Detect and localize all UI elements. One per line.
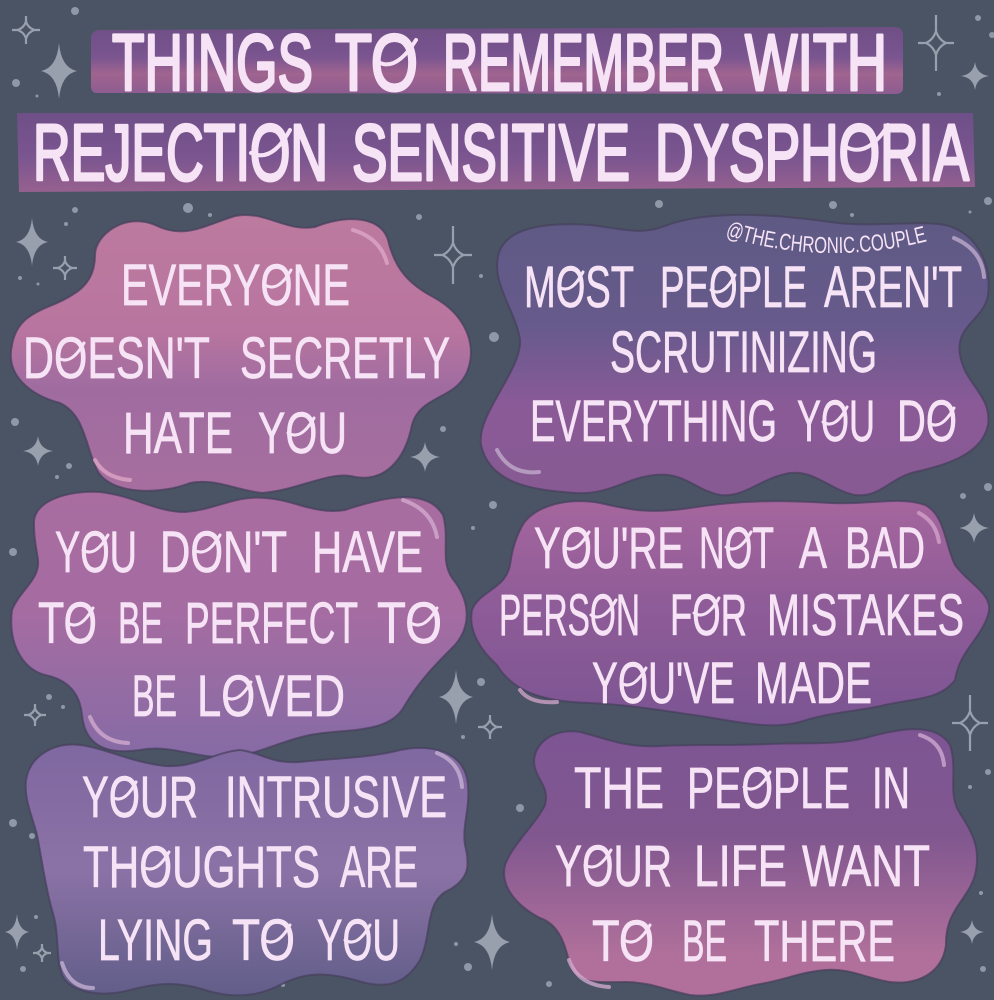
statement text: TO: [377, 591, 442, 656]
title line two: REJECTION: [33, 108, 328, 197]
letter O flourishes: [68, 535, 437, 699]
statement text: YOUR: [82, 765, 198, 830]
highlight: [95, 230, 387, 480]
statement text: TO: [592, 909, 654, 974]
statement text: DOESN'T: [23, 326, 210, 391]
statement text: THERE: [754, 909, 895, 974]
title line one: [112, 18, 887, 107]
statement text: YOU'RE: [534, 516, 684, 581]
statement text: THOUGHTS: [83, 835, 320, 900]
statement text: EVERYONE: [121, 253, 350, 318]
letter O flourishes: [58, 270, 314, 435]
blob shape: [471, 501, 989, 725]
title bar: second line: [17, 113, 975, 192]
panel: the people in your life want to be there: [504, 729, 977, 996]
blob shape: [26, 745, 468, 995]
highlight: [62, 753, 462, 988]
highlight: [520, 513, 939, 702]
statement text: EVERYTHING: [530, 389, 777, 454]
statement text: BE: [682, 909, 727, 974]
statement text: BAD: [845, 516, 925, 581]
statement text: HAVE: [312, 520, 423, 585]
statement text: YOU: [797, 389, 875, 454]
statement text: DON'T: [160, 520, 287, 585]
statement text: ARE: [340, 835, 418, 900]
statement text: [555, 756, 930, 974]
title line one: TO: [335, 18, 418, 107]
statement text: YOU: [317, 908, 400, 973]
panel: your intrusive thoughts are lying to you: [26, 745, 468, 995]
statement text: A: [799, 516, 827, 581]
title line one: REMEMBER: [443, 18, 724, 107]
statement text: MOST: [524, 255, 634, 320]
statement text: PERSON: [499, 583, 640, 648]
title line one: THINGS: [112, 18, 313, 107]
title line one: WITH: [745, 18, 887, 107]
statement text: TO: [38, 591, 97, 656]
statement text: WANT: [802, 834, 930, 899]
statement text: YOU: [55, 520, 137, 585]
statement text: HATE: [123, 401, 233, 466]
panel: you don't have to be perfect to be loved: [11, 492, 467, 757]
statement text: BE: [118, 591, 163, 656]
statement text: TO: [232, 908, 295, 973]
statement text: YOUR: [555, 834, 672, 899]
highlight: [90, 500, 437, 743]
watermark handle: @THE.CHRONIC.COUPLE: [727, 222, 927, 254]
statement text: INTRUSIVE: [225, 765, 447, 830]
panel: most people aren't scrutinizing everything you do: [480, 214, 990, 496]
statement text: YOU: [258, 401, 347, 466]
statement text: PERFECT: [185, 591, 358, 656]
statement text: [82, 765, 447, 973]
panel: you're not a bad person for mistakes you've made: [471, 501, 989, 725]
blob shape: [11, 215, 471, 493]
title line two: [33, 108, 969, 197]
statement text: IN: [872, 756, 910, 821]
statement text: YOU'VE: [592, 651, 735, 716]
statement text: SECRETLY: [240, 326, 450, 391]
statement text: [23, 253, 450, 466]
title line two: SENSITIVE: [352, 108, 630, 197]
statement text: [38, 520, 442, 729]
statement text: PEOPLE: [660, 255, 807, 320]
letter O flourishes: [559, 272, 954, 425]
statement text: MADE: [755, 651, 872, 716]
statement text: [524, 255, 962, 454]
blob shape: [11, 492, 467, 757]
statement text: BE: [132, 664, 177, 729]
letter O flourishes: [564, 532, 751, 685]
panel: everyone doesn't secretly hate you: [11, 215, 471, 493]
title: [17, 18, 975, 197]
statement text: LOVED: [197, 664, 345, 729]
statement text: DO: [897, 389, 957, 454]
letter O flourishes: [585, 772, 770, 942]
statement text: THE: [574, 756, 664, 821]
statement text: PEOPLE: [687, 756, 850, 821]
letter O flourishes in the title: [251, 40, 888, 155]
statement text: [499, 516, 964, 716]
letter O flourishes: [112, 782, 370, 942]
statement text: NOT: [699, 516, 774, 581]
statement text: LYING: [98, 908, 213, 973]
blob shape: [504, 729, 977, 996]
highlight: [569, 735, 944, 987]
statement text: LIFE: [694, 834, 787, 899]
title bar: first line: [91, 27, 903, 94]
highlight: [497, 238, 984, 472]
blob shape: [481, 215, 989, 495]
statement text: FOR: [670, 583, 747, 648]
